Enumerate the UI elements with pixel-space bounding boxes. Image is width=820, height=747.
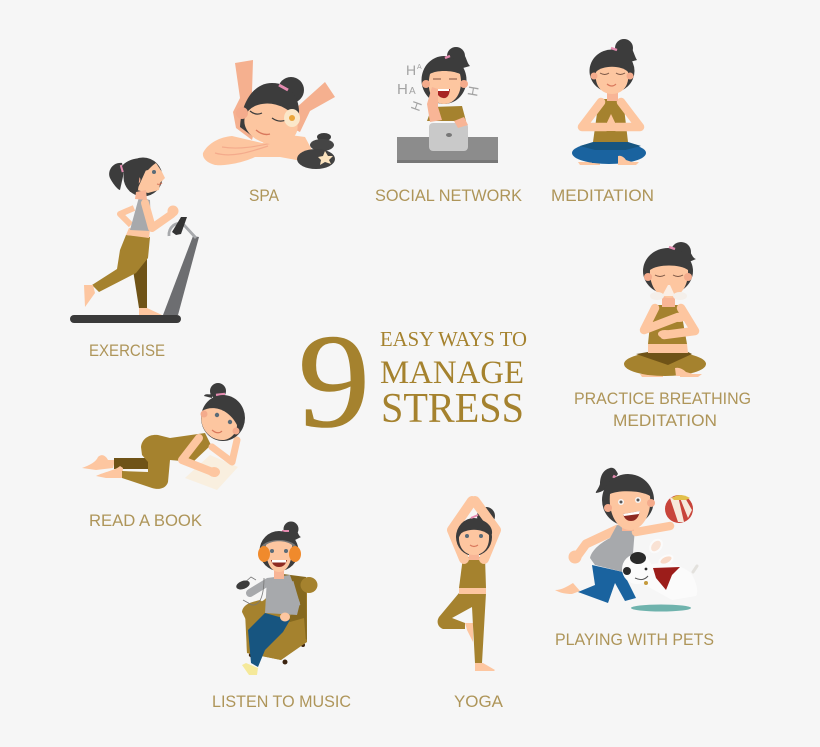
illustration: practice breathing meditation [624,242,706,377]
text: laughing sounds: H [406,62,416,78]
big number nine: 9 [298,307,370,455]
illustration: playing with pets [555,468,697,612]
illustration: listen to music [235,522,318,675]
illustration: meditation [572,39,646,165]
illustration: yoga [438,501,496,671]
title line: stress: STRESS [381,386,524,432]
label: meditation: MEDITATION [551,187,654,205]
illustration: read a book [82,383,245,490]
label: playing with pets: PLAYING WITH PETS [555,631,714,649]
label: social network: SOCIAL NETWORK [375,187,522,205]
text: laughing sounds: H [397,81,408,98]
label: yoga: YOGA [454,693,503,711]
label: spa: SPA [249,187,279,205]
label: practice breathing meditation: MEDITATION [613,412,717,430]
title [298,307,527,455]
text: laughing sounds: A [409,86,416,97]
illustration: spa [203,60,335,169]
text: laughing sounds: A [417,64,422,71]
label: exercise: EXERCISE [89,342,165,360]
title line: manage: MANAGE [380,355,524,391]
illustration: social network [397,47,498,163]
illustration: exercise [70,158,199,323]
text: laughing sounds: H [408,99,425,113]
title line: easy ways to: EASY WAYS TO [380,327,527,351]
label: listen to music: LISTEN TO MUSIC [212,693,351,711]
label: practice breathing meditation [574,390,751,430]
label: practice breathing meditation: PRACTICE BREATHING [574,390,751,408]
label: read a book: READ A BOOK [89,512,202,530]
text: laughing sounds: H [464,85,482,98]
text: laughing sounds [397,62,482,113]
